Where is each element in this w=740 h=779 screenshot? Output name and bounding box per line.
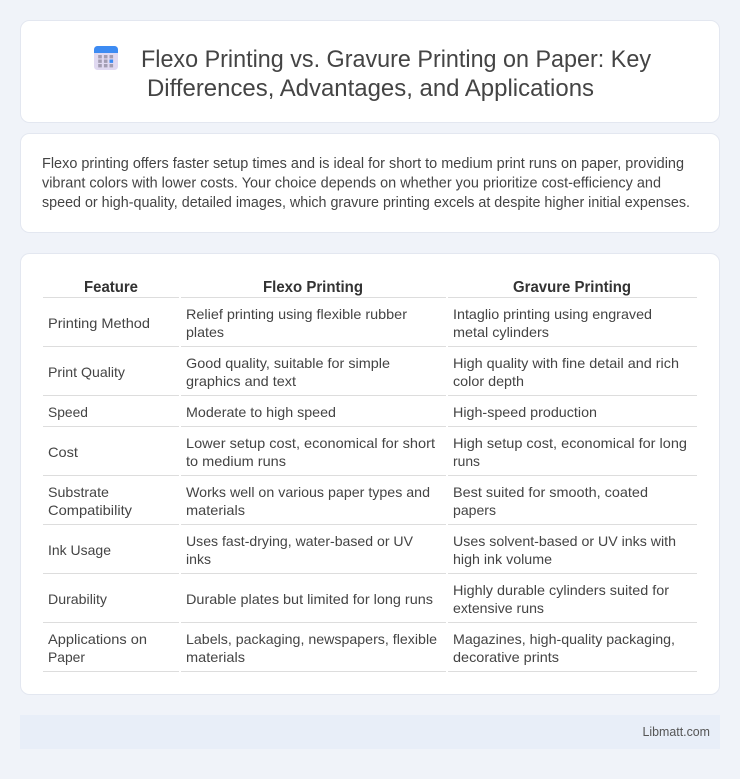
table header row: Flexo Printing (263, 279, 363, 296)
table row: Printing Method: Printing Method (48, 315, 150, 331)
table row: Durability: extensive runs (453, 600, 544, 616)
table row: Substrate Compatibility: Best suited for smooth, coated (453, 484, 648, 500)
table row: Print Quality: Good quality, suitable for simple (186, 355, 390, 371)
table row: Substrate Compatibility: Works well on various paper types and (186, 484, 430, 500)
table row: Cost: to medium runs (186, 453, 286, 469)
footer bar (20, 715, 720, 749)
table row: Substrate Compatibility: Substrate (48, 484, 109, 500)
table row: Ink Usage: Uses fast-drying, water-based or UV (186, 533, 414, 549)
table row: Durability: Durable plates but limited for long runs (186, 591, 433, 607)
table row: Cost: Lower setup cost, economical for short (186, 435, 435, 451)
table row: Durability: Durability (48, 591, 107, 607)
table header row (43, 279, 697, 298)
panel: header (20, 20, 720, 122)
text block: summary paragraph: vibrant colors with lower costs. Your choice depends on whether you prioritize cost-efficiency and (42, 176, 661, 192)
table row: Durability (43, 582, 697, 623)
table row: Applications on Paper: decorative prints (453, 649, 559, 665)
table row: Ink Usage: inks (186, 551, 211, 567)
panel: introduction (20, 134, 720, 232)
table row: Applications on Paper (43, 631, 697, 672)
table row: Printing Method: Intaglio printing using engraved (453, 306, 652, 322)
table row: Substrate Compatibility (43, 484, 697, 525)
table row: Print Quality: color depth (453, 373, 524, 389)
table row: Speed: Moderate to high speed (186, 404, 336, 420)
table row: Cost: runs (453, 453, 480, 469)
table row: Applications on Paper: materials (186, 649, 245, 665)
table row: Applications on Paper: Magazines, high-quality packaging, (453, 631, 675, 647)
table row: Substrate Compatibility: Compatibility (48, 502, 132, 518)
table row: Print Quality: graphics and text (186, 373, 296, 389)
table row: Printing Method: metal cylinders (453, 324, 549, 340)
title: Flexo Printing vs. Gravure Printing on Paper: Key (141, 46, 651, 73)
table row: Printing Method: Relief printing using flexible rubber (186, 306, 407, 322)
table header row: Feature (84, 279, 138, 296)
table row: Print Quality (43, 355, 697, 396)
table row: Durability: Highly durable cylinders suited for (453, 582, 669, 598)
footer bar: Libmatt.com (642, 725, 710, 739)
table row: Substrate Compatibility: papers (453, 502, 496, 518)
text block: summary paragraph (42, 156, 690, 211)
table row: Print Quality: High quality with fine detail and rich (453, 355, 679, 371)
table row: Ink Usage: Uses solvent-based or UV inks with (453, 533, 676, 549)
table row: Ink Usage: Ink Usage (48, 542, 111, 558)
table row: Printing Method: plates (186, 324, 224, 340)
icon: calendar grid (94, 46, 118, 70)
text block: summary paragraph: Flexo printing offers faster setup times and is ideal for short to medium print runs on paper, providing (42, 156, 684, 172)
table row: Applications on Paper: Applications on (48, 631, 147, 647)
table row: Substrate Compatibility: materials (186, 502, 245, 518)
table row: Cost: Cost (48, 444, 78, 460)
table header row: Gravure Printing (513, 279, 631, 296)
table row: Cost (43, 435, 697, 476)
table row: Speed (43, 404, 697, 427)
title (141, 46, 651, 102)
table row: Ink Usage: high ink volume (453, 551, 552, 567)
table row: Speed: Speed (48, 404, 88, 420)
title: Differences, Advantages, and Applications (147, 75, 594, 102)
table row: Print Quality: Print Quality (48, 364, 125, 380)
table row: Applications on Paper: Labels, packaging, newspapers, flexible (186, 631, 437, 647)
table row: Applications on Paper: Paper (48, 649, 85, 665)
table row: Ink Usage (43, 533, 697, 574)
table row: Cost: High setup cost, economical for long (453, 435, 687, 451)
table row: Printing Method (43, 306, 697, 347)
text block: summary paragraph: speed or high-quality, detailed images, which gravure printing excels at despite higher initial expenses. (42, 195, 690, 211)
panel: comparison table (20, 254, 720, 694)
table row: Speed: High-speed production (453, 404, 597, 420)
